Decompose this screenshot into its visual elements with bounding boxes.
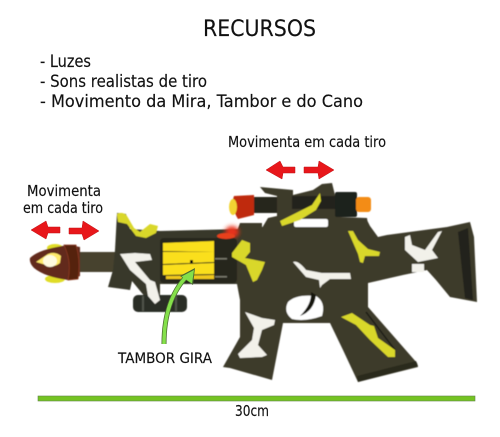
label: scope movement: Movimenta em cada tiro	[228, 133, 386, 151]
main body and stock	[223, 220, 477, 382]
scope window	[294, 219, 328, 227]
arrows: barrel movement	[31, 221, 99, 240]
feature list: - Luzes	[40, 52, 91, 72]
green drum arrow	[164, 268, 195, 344]
scope	[229, 192, 371, 219]
scope mount	[260, 183, 368, 228]
trigger guard	[286, 292, 323, 320]
label: barrel movement	[23, 182, 103, 217]
size bar	[38, 396, 475, 401]
camo: white	[120, 231, 442, 358]
feature list: - Sons realistas de tiro	[40, 72, 207, 92]
front block and top rail	[108, 213, 240, 303]
barrel	[78, 252, 122, 272]
muzzle	[30, 245, 80, 280]
feature list: - Movimento da Mira, Tambor e do Cano	[40, 92, 363, 112]
camo: yellow	[117, 193, 395, 357]
title: RECURSOS	[203, 17, 316, 42]
muzzle glow	[45, 244, 65, 283]
stock shadow	[458, 228, 473, 300]
label: barrel movement: em cada tiro	[23, 199, 103, 217]
arrows: scope movement	[266, 161, 334, 179]
label: barrel movement: Movimenta	[27, 182, 101, 200]
grip details	[366, 312, 395, 350]
drum	[160, 233, 237, 283]
magazine shadow	[357, 361, 418, 382]
feature list	[40, 52, 363, 112]
laser under rail	[133, 295, 187, 312]
size label: 30cm	[235, 402, 269, 420]
label: drum spins: TAMBOR GIRA	[117, 351, 212, 367]
scope glow	[225, 226, 239, 238]
toy gun	[30, 183, 477, 382]
